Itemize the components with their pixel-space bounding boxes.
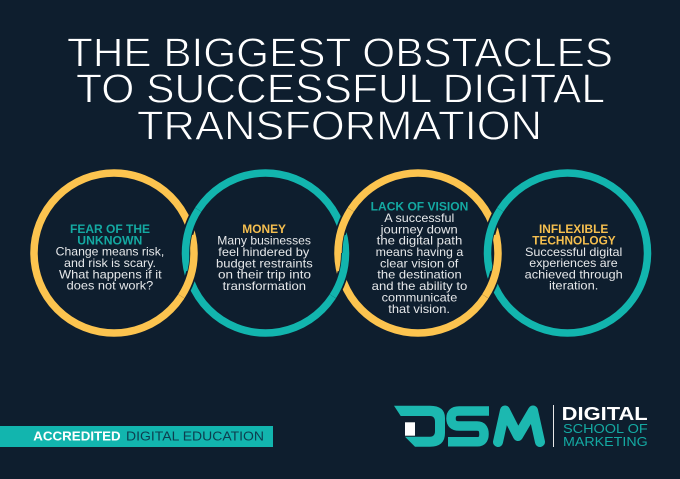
heading: lack of vision: LACK OF VISION (371, 202, 468, 214)
banner: accredited digital education (0, 426, 273, 447)
logo text: DIGITAL (562, 404, 648, 424)
icon: DSM letter mark (394, 406, 540, 447)
text: fear of the unknown: Change means risk, (56, 246, 164, 259)
text: lack of vision: the digital path (377, 235, 462, 248)
text: fear of the unknown (56, 246, 164, 293)
title (67, 29, 613, 148)
banner: accredited digital education: DIGITAL EDUCATION (126, 428, 264, 443)
panel: lack of vision (338, 173, 498, 333)
text: lack of vision: communicate (382, 291, 457, 304)
heading: fear of the unknown (70, 224, 150, 247)
text: lack of vision (372, 212, 467, 316)
title: THE BIGGEST OBSTACLES (67, 29, 613, 75)
title: TRANSFORMATION (137, 102, 542, 148)
text: inflexible technology: experiences are (529, 257, 618, 270)
heading: fear of the unknown: FEAR OF THE (70, 224, 150, 236)
text: inflexible technology: iteration. (549, 280, 598, 293)
logo text: MARKETING (563, 435, 648, 449)
text: lack of vision: and the ability to (372, 280, 467, 293)
text: lack of vision: that vision. (388, 303, 450, 316)
text: money (216, 235, 313, 293)
text: lack of vision: A successful (384, 212, 454, 225)
panel: money (186, 173, 346, 333)
banner: accredited digital education: ACCREDITED (33, 428, 121, 443)
logo: DSM Digital School of Marketing (394, 404, 648, 449)
logo text: SCHOOL OF (563, 422, 648, 436)
panel: inflexible technology (488, 173, 648, 333)
text: fear of the unknown: does not work? (67, 280, 154, 293)
panel: fear of the unknown (34, 173, 194, 333)
text: fear of the unknown: and risk is scary. (64, 257, 156, 270)
text: inflexible technology (525, 246, 623, 293)
title: TO SUCCESSFUL DIGITAL (76, 65, 605, 111)
text: inflexible technology: Successful digital (525, 246, 622, 259)
text: lack of vision: means having a (376, 246, 464, 259)
text: inflexible technology: achieved through (525, 268, 623, 281)
heading: inflexible technology: INFLEXIBLE (539, 224, 609, 236)
interlocking ring crossings (181, 210, 500, 296)
text: money: Many businesses (217, 235, 311, 248)
heading: inflexible technology (532, 224, 616, 247)
text: money: feel hindered by (218, 246, 310, 259)
logo text (562, 404, 648, 449)
text: money: transformation (223, 280, 306, 293)
heading: inflexible technology: TECHNOLOGY (532, 235, 616, 247)
text: money: on their trip into (218, 269, 311, 282)
text: lack of vision: clear vision of (380, 257, 459, 270)
heading: fear of the unknown: UNKNOWN (77, 235, 142, 247)
heading: money: MONEY (242, 224, 286, 236)
text: lack of vision: the destination (377, 269, 462, 282)
text: lack of vision: journey down (380, 223, 458, 236)
text: money: budget restraints (216, 257, 313, 270)
text: fear of the unknown: What happens if it (59, 268, 163, 281)
